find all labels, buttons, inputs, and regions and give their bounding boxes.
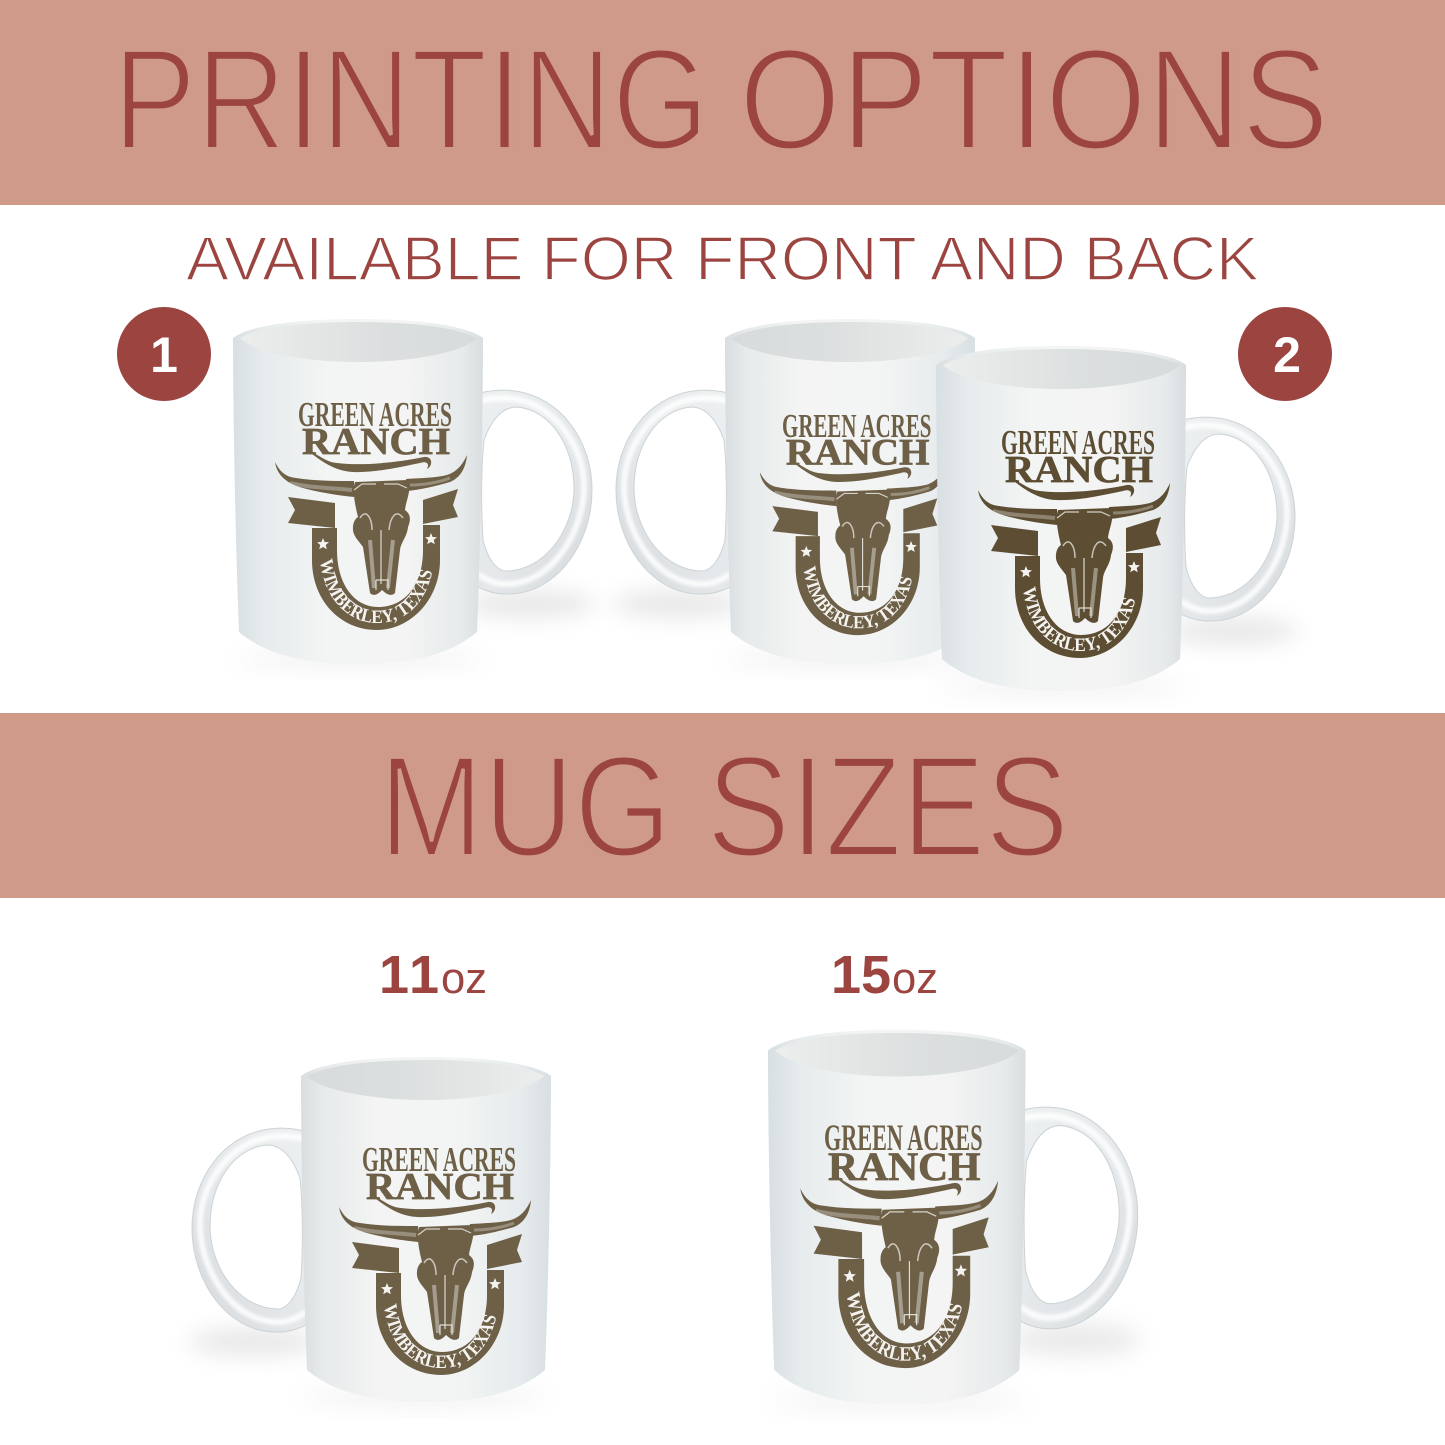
mug logo: front mug: GREEN ACRES [1001,423,1155,462]
mug logo: 15oz: GREEN ACRES [824,1116,983,1158]
mug logo: front mug [978,423,1170,658]
mug logo: rear mug: RANCH [786,431,930,472]
mug logo: 11oz [339,1140,531,1375]
mug logo: 11oz: RANCH [366,1166,514,1208]
mug logo: green acres ranch: WIMBERLEY, TEXAS [320,558,432,624]
badge: number 2: 2 [1273,327,1301,383]
label: 11oz: 11 [379,945,439,1005]
mug logo: green acres ranch [275,395,467,630]
mug logo: 15oz: WIMBERLEY, TEXAS [847,1291,962,1361]
mug logo: rear mug: WIMBERLEY, TEXAS [804,566,912,629]
heading: printing options [113,19,1329,180]
mug: front print, handle right [233,319,636,664]
mug logo: 11oz: GREEN ACRES [362,1140,516,1179]
mug logo: front mug: WIMBERLEY, TEXAS [1024,586,1135,652]
badge: number 1 [117,307,211,401]
mug: 15oz, handle right [768,1030,1138,1405]
heading: printing options: PRINTING [113,19,709,180]
mug logo: front mug: RANCH [1005,449,1153,491]
label: 11oz [379,945,487,1005]
heading: mug sizes: MUG SIZES [379,726,1069,887]
mug logo: rear mug: GREEN ACRES [782,408,931,445]
mug: 11oz, handle left [192,1057,551,1402]
label: 11oz: oz [441,954,487,1003]
label: 15oz: 15 [831,945,891,1005]
label: 15oz [831,945,938,1005]
label: 15oz: oz [892,954,938,1003]
mug: back print, rear mug, handle left [616,319,1016,664]
mug logo: rear mug [760,408,938,636]
panel: mug sizes banner [0,713,1445,898]
mug logo: green acres ranch: GREEN ACRES [298,395,452,434]
subheading: available for front and back: AVAILABLE FOR FRONT AND BACK [186,225,1259,294]
heading: printing options: OPTIONS [739,19,1329,180]
badge: number 1: 1 [150,327,178,383]
mug logo: 11oz: WIMBERLEY, TEXAS [384,1303,496,1368]
mug logo: 15oz [800,1116,998,1368]
mug logo: green acres ranch: RANCH [302,421,450,463]
mug logo: 15oz: RANCH [828,1143,980,1189]
mug: back print, front mug, handle right [936,346,1296,691]
badge: number 2 [1238,307,1332,401]
panel: printing options banner [0,0,1445,205]
